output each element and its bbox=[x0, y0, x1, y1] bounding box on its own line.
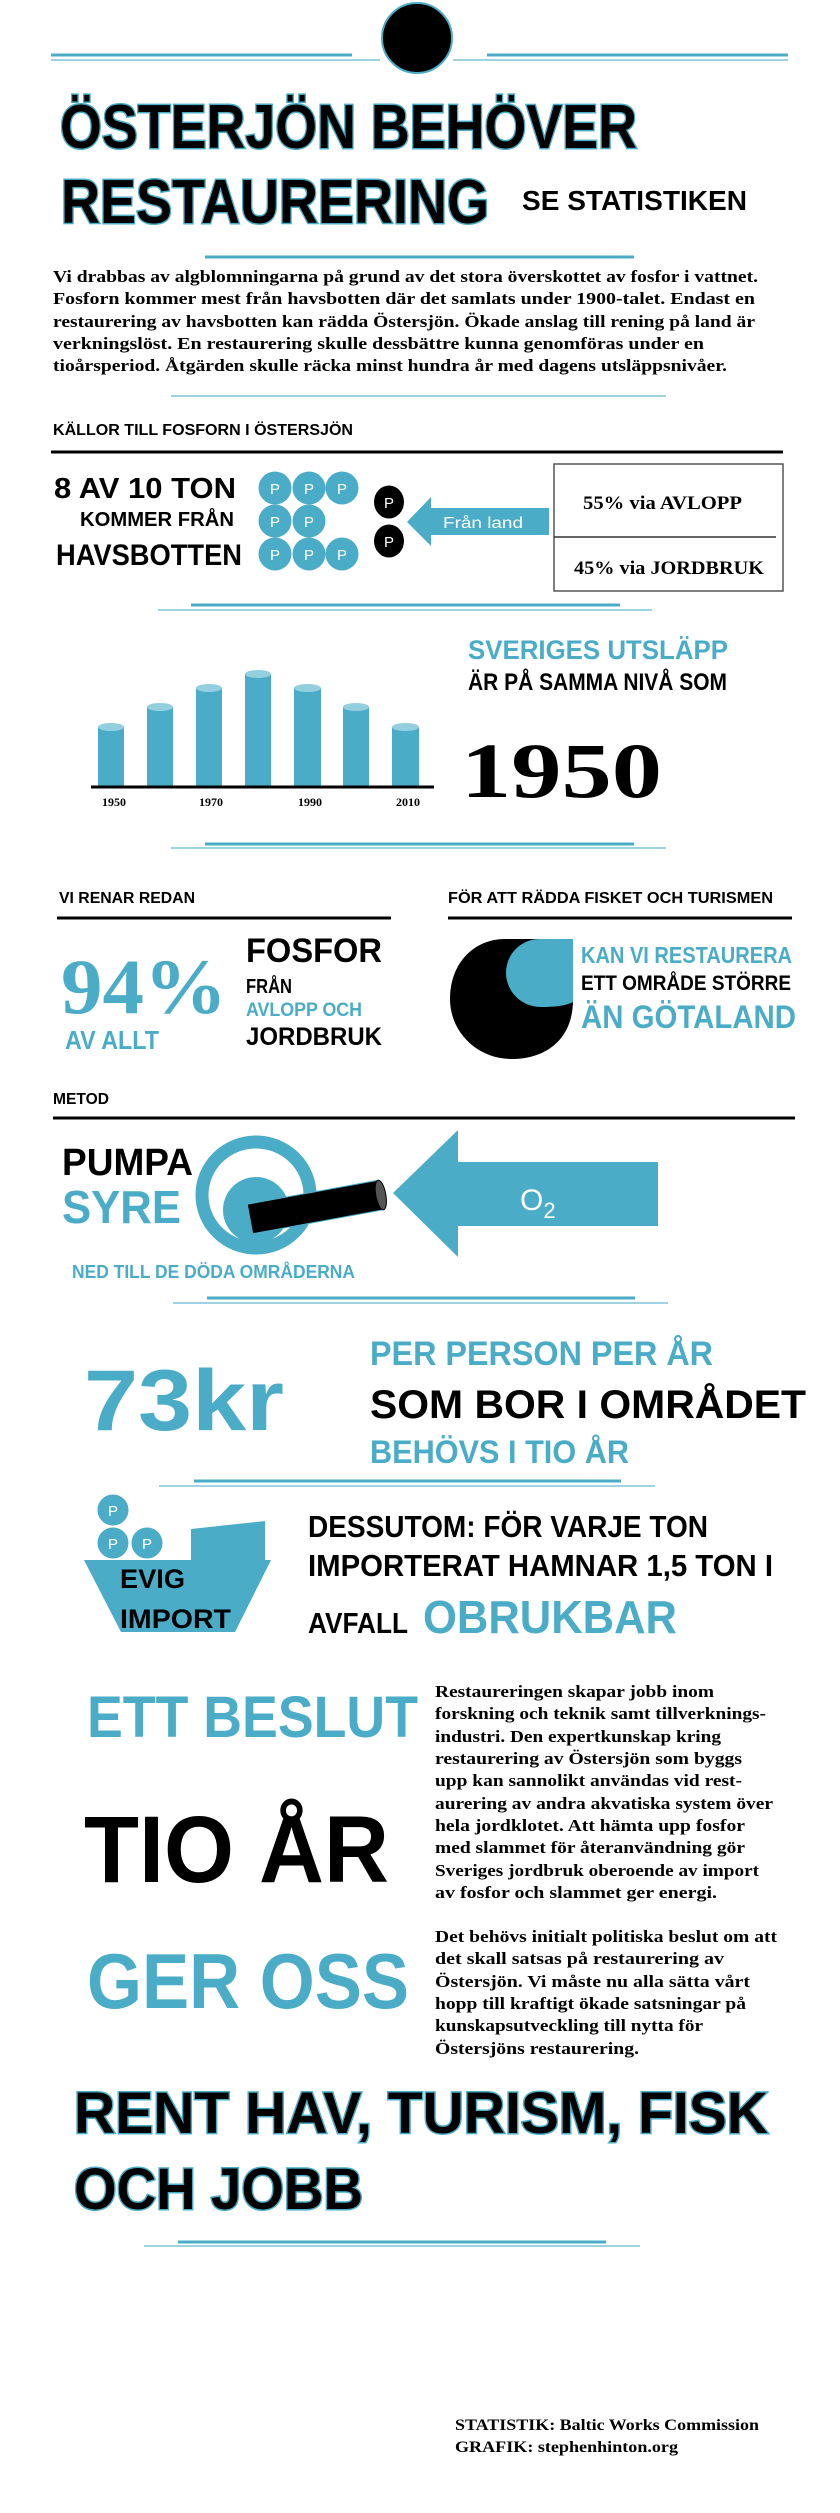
arrow: O2: 2 bbox=[543, 1198, 556, 1223]
icon: phosphorus circles: P bbox=[384, 534, 394, 551]
text: ett beslut tio år ger oss: GER OSS bbox=[87, 1937, 409, 2025]
text: dessutom bbox=[308, 1509, 773, 1643]
icon: boat evig import: EVIG bbox=[120, 1564, 185, 1594]
text: 8 av 10 ton bbox=[54, 473, 242, 572]
text block: politiska beslut: Det behövs initialt politiska beslut om att bbox=[435, 1927, 777, 1946]
arrow: från land: Från land bbox=[443, 514, 523, 532]
text block: restaureringen skapar jobb: Restaureringen skapar jobb inom bbox=[435, 1682, 714, 1701]
text block: restaureringen skapar jobb: aurering av andra akvatiska system över bbox=[435, 1794, 774, 1813]
icon: phosphorus circles: P bbox=[337, 547, 347, 564]
bar chart: 1990 bbox=[298, 795, 322, 809]
arrow: O2: O bbox=[520, 1184, 543, 1217]
text: ett beslut tio år ger oss: ETT BESLUT bbox=[87, 1685, 418, 1750]
panel: rädda fisket: FÖR ATT RÄDDA FISKET OCH TURISMEN bbox=[448, 888, 773, 907]
panel: vi renar redan: AV ALLT bbox=[65, 1025, 159, 1055]
panel: vi renar redan: VI RENAR REDAN bbox=[59, 890, 195, 907]
box: sources split: 55% via AVLOPP bbox=[583, 493, 742, 514]
closing headline: RENT HAV, TURISM, FISK bbox=[74, 2081, 768, 2146]
icon: phosphorus circles: P bbox=[270, 481, 280, 498]
text: dessutom: IMPORTERAT HAMNAR 1,5 TON I bbox=[308, 1548, 773, 1583]
icon: phosphorus circles: P bbox=[270, 514, 280, 531]
icon: phosphorus circles bbox=[258, 472, 404, 570]
heading: metod: METOD bbox=[53, 1091, 109, 1108]
text block: restaureringen skapar jobb: restaurering av Östersjön som byggs bbox=[435, 1749, 742, 1768]
panel: vi renar redan: JORDBRUK bbox=[246, 1023, 382, 1051]
text block: politiska beslut: det skall satsas på restaurering av bbox=[435, 1949, 725, 1968]
arrow: från land bbox=[407, 497, 549, 546]
credits: STATISTIK: Baltic Works Commission bbox=[455, 2417, 759, 2434]
text block: politiska beslut: kunskapsutveckling till nytta för bbox=[435, 2016, 704, 2035]
text block: politiska beslut: hopp till kraftigt ökade satsningar på bbox=[435, 1994, 747, 2013]
intro paragraph: Fosforn kommer mest från havsbotten där det samlats under 1900-talet. Endast en bbox=[53, 289, 756, 308]
icon: phosphorus circles: P bbox=[304, 481, 314, 498]
text: per person: BEHÖVS I TIO ÅR bbox=[370, 1434, 629, 1470]
text: sveriges utsläpp: SVERIGES UTSLÄPP bbox=[468, 635, 728, 665]
panel: rädda fisket: KAN VI RESTAURERA bbox=[581, 942, 792, 968]
credits bbox=[455, 2417, 759, 2456]
panel: rädda fisket bbox=[448, 888, 796, 1059]
bar chart bbox=[91, 670, 434, 809]
icon: boat evig import bbox=[84, 1494, 271, 1634]
title bbox=[60, 93, 637, 237]
intro paragraph: Vi drabbas av algblomningarna på grund av det stora överskottet av fosfor i vattnet. bbox=[53, 267, 758, 286]
text: dessutom: AVFALL bbox=[308, 1608, 408, 1640]
closing headline bbox=[74, 2081, 768, 2222]
icon: black circle bbox=[382, 3, 452, 73]
big number 1950: 1950 bbox=[461, 727, 662, 814]
bar chart: 2010 bbox=[396, 795, 420, 809]
closing headline: OCH JOBB bbox=[74, 2157, 363, 2222]
subtitle: SE STATISTIKEN bbox=[522, 185, 747, 216]
text: sveriges utsläpp bbox=[468, 635, 728, 696]
text block: restaureringen skapar jobb bbox=[435, 1682, 774, 1902]
panel: vi renar redan bbox=[57, 890, 391, 1055]
intro paragraph: tioårsperiod. Åtgärden skulle räcka minst hundra år med dagens utsläppsnivåer. bbox=[53, 356, 727, 375]
icon: boat evig import: P bbox=[108, 1503, 118, 1520]
text block: restaureringen skapar jobb: forskning och teknik samt tillverknings- bbox=[435, 1704, 766, 1723]
text block: politiska beslut: Östersjön. Vi måste nu alla sätta vårt bbox=[435, 1972, 750, 1991]
icon: boat evig import: P bbox=[142, 1536, 152, 1553]
text: pumpa syre: PUMPA bbox=[62, 1142, 193, 1184]
text: ett beslut tio år ger oss bbox=[84, 1685, 418, 2025]
panel: rädda fisket: ÄN GÖTALAND bbox=[581, 999, 796, 1035]
intro paragraph: verkningslöst. En restaurering skulle dessbättre kunna genomföras under en bbox=[53, 334, 705, 353]
title: RESTAURERING bbox=[61, 168, 489, 237]
panel: vi renar redan: FRÅN bbox=[246, 974, 292, 998]
text: 8 av 10 ton: 8 AV 10 TON bbox=[54, 473, 236, 505]
text block: politiska beslut bbox=[435, 1927, 777, 2058]
text: dessutom: OBRUKBAR bbox=[423, 1591, 677, 1643]
text block: restaureringen skapar jobb: upp kan sannolikt användas vid rest- bbox=[435, 1771, 742, 1790]
text: 8 av 10 ton: KOMMER FRÅN bbox=[80, 507, 234, 531]
caption: ned till de döda områderna: NED TILL DE DÖDA OMRÅDERNA bbox=[72, 1262, 355, 1282]
text: 8 av 10 ton: HAVSBOTTEN bbox=[56, 539, 242, 572]
text: per person: SOM BOR I OMRÅDET bbox=[370, 1382, 806, 1427]
box: sources split: 45% via JORDBRUK bbox=[574, 558, 764, 579]
text block: restaureringen skapar jobb: industri. Den expertkunskap kring bbox=[435, 1727, 722, 1746]
text: pumpa syre: SYRE bbox=[62, 1181, 181, 1233]
heading: källor: KÄLLOR TILL FOSFORN I ÖSTERSJÖN bbox=[53, 420, 353, 439]
text block: restaureringen skapar jobb: med slammet för återanvändning gör bbox=[435, 1838, 746, 1857]
panel: rädda fisket: ETT OMRÅDE STÖRRE bbox=[581, 971, 791, 995]
text: per person bbox=[370, 1335, 806, 1470]
text: ett beslut tio år ger oss: TIO ÅR bbox=[84, 1797, 389, 1903]
big number 73kr: 73kr bbox=[84, 1353, 284, 1449]
text: sveriges utsläpp: ÄR PÅ SAMMA NIVÅ SOM bbox=[468, 668, 727, 696]
text block: restaureringen skapar jobb: av fosfor och slammet ger energi. bbox=[435, 1883, 717, 1902]
text: pumpa syre bbox=[62, 1142, 193, 1233]
bar chart: 1970 bbox=[199, 795, 223, 809]
text: per person: PER PERSON PER ÅR bbox=[370, 1335, 713, 1373]
panel: vi renar redan: FOSFOR bbox=[246, 932, 382, 970]
icon: phosphorus circles: P bbox=[304, 514, 314, 531]
icon: phosphorus circles: P bbox=[304, 547, 314, 564]
text block: restaureringen skapar jobb: hela jordklotet. Att hämta upp fosfor bbox=[435, 1816, 746, 1835]
box: sources split bbox=[554, 464, 783, 591]
panel: vi renar redan: 94% bbox=[61, 943, 227, 1030]
icon: boat evig import: IMPORT bbox=[120, 1604, 232, 1634]
intro paragraph bbox=[53, 267, 758, 375]
panel: vi renar redan: AVLOPP OCH bbox=[246, 1000, 362, 1021]
arrow: O2 bbox=[393, 1130, 658, 1257]
icon: phosphorus circles: P bbox=[337, 481, 347, 498]
credits: GRAFIK: stephenhinton.org bbox=[455, 2439, 678, 2456]
text block: politiska beslut: Östersjöns restaurering. bbox=[435, 2039, 639, 2058]
icon: target with pipe bbox=[202, 1142, 388, 1248]
intro paragraph: restaurering av havsbotten kan rädda Östersjön. Ökade anslag till rening på land är bbox=[53, 312, 756, 331]
text: dessutom: DESSUTOM: FÖR VARJE TON bbox=[308, 1509, 708, 1544]
icon: phosphorus circles: P bbox=[270, 547, 280, 564]
title: ÖSTERJÖN BEHÖVER bbox=[60, 93, 637, 162]
bar chart: 1950 bbox=[102, 795, 126, 809]
text block: restaureringen skapar jobb: Sveriges jordbruk oberoende av import bbox=[435, 1861, 759, 1880]
icon: phosphorus circles: P bbox=[384, 495, 394, 512]
icon: boat evig import: P bbox=[108, 1536, 118, 1553]
